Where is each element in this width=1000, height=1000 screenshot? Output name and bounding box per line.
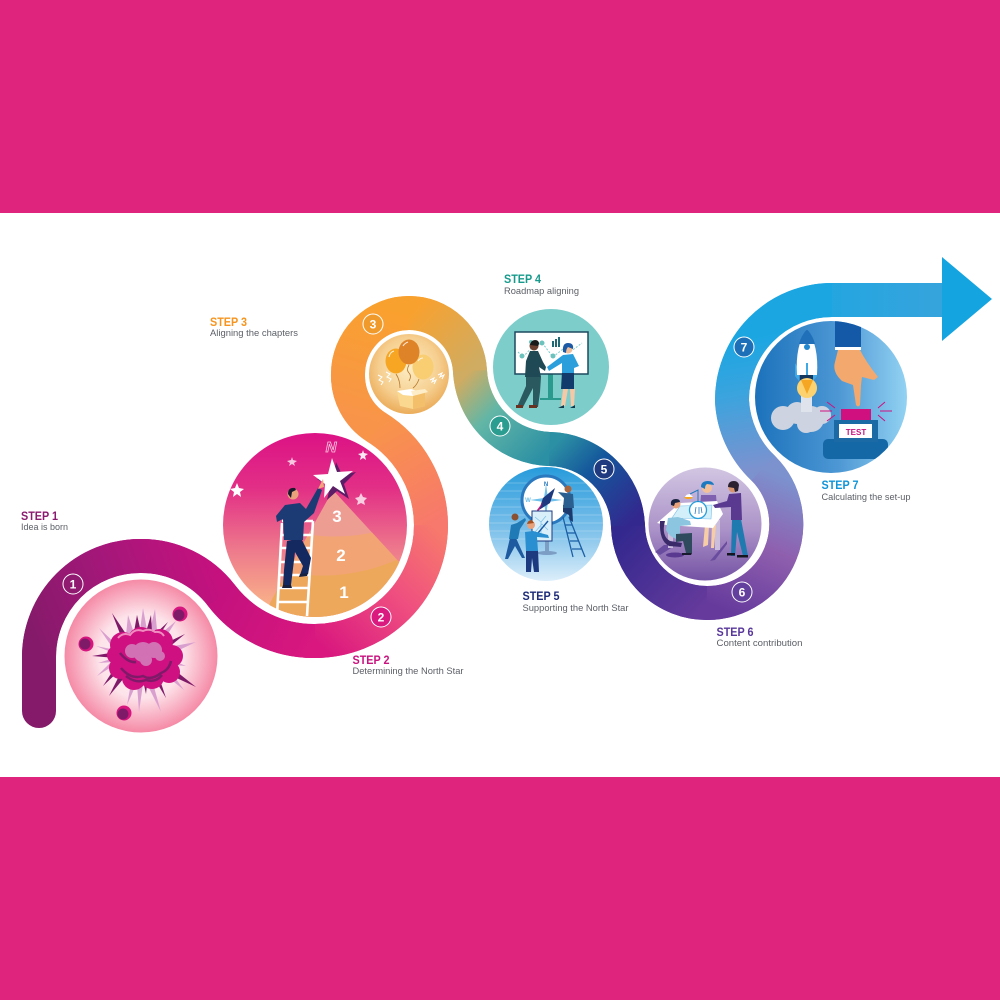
level numbers — [332, 507, 349, 602]
badge 1 — [63, 574, 83, 594]
step 5 label: Supporting the North Star — [522, 603, 628, 614]
ladder — [563, 517, 585, 557]
illustration: roadmap aligning — [493, 309, 609, 425]
badge 7 — [734, 337, 754, 357]
map display — [532, 511, 557, 555]
step 3 label: Aligning the chapters — [210, 328, 298, 339]
compass: W — [525, 498, 531, 504]
star — [313, 458, 356, 500]
pointing hand — [834, 350, 878, 406]
illustration: explosion idea — [64, 580, 218, 732]
top pink band — [0, 0, 1000, 213]
test machine base — [823, 439, 888, 459]
step 6 label: Content contribution — [716, 638, 802, 649]
small stars — [230, 450, 368, 505]
step 4 label — [504, 272, 579, 297]
badge 6 — [732, 582, 752, 602]
badge 5: 5 — [601, 462, 608, 476]
cloud — [107, 627, 183, 690]
cloud highlight — [125, 642, 165, 666]
badge 2: 2 — [378, 610, 385, 624]
step 4 label: STEP 4 — [504, 272, 541, 286]
level numbers: 2 — [336, 546, 346, 565]
step 5 label: STEP 5 — [522, 589, 560, 603]
button housing — [834, 420, 878, 442]
step 7 label: STEP 7 — [822, 478, 859, 492]
step 5 label — [522, 589, 628, 614]
badge 6: 6 — [739, 586, 746, 600]
man — [516, 340, 546, 408]
whiteboard — [515, 332, 588, 400]
step 4 label: Roadmap aligning — [504, 286, 579, 297]
step 1 label — [21, 509, 68, 533]
particles — [78, 606, 188, 720]
step 3 label: STEP 3 — [210, 315, 247, 329]
balloons — [386, 340, 434, 388]
person left — [505, 514, 526, 559]
standing man — [713, 481, 748, 558]
badge 7: 7 — [741, 340, 748, 354]
winding road arrow — [39, 257, 992, 711]
ladder — [277, 521, 313, 616]
step 7 label: Calculating the set-up — [822, 492, 910, 503]
step 6 label: STEP 6 — [716, 625, 754, 639]
test label — [839, 424, 872, 438]
step 2 label — [352, 653, 464, 677]
N letter: N — [326, 439, 338, 456]
step 1 label: Idea is born — [21, 522, 68, 533]
badge 2 — [371, 607, 391, 627]
illustration: supporting the north star — [489, 467, 603, 581]
woman — [547, 343, 579, 408]
step 2 label: STEP 2 — [352, 653, 390, 667]
smoke cloud — [771, 392, 831, 433]
level numbers: 1 — [339, 583, 349, 602]
table legs — [655, 520, 727, 561]
step 1 label: STEP 1 — [21, 509, 58, 523]
woman behind table — [700, 481, 717, 548]
person middle — [525, 520, 549, 572]
badge 3: 3 — [370, 318, 377, 332]
illustration: rocket launch and test button — [755, 318, 907, 473]
table top — [657, 490, 723, 528]
level numbers: 3 — [332, 507, 342, 526]
climbing man — [276, 479, 324, 588]
sleeve — [835, 321, 861, 347]
light cone — [270, 492, 400, 617]
dark spikes — [92, 613, 196, 698]
person on ladder — [558, 486, 574, 522]
button — [841, 409, 871, 421]
bottom pink band — [0, 777, 1000, 1000]
compass — [522, 476, 570, 524]
light spikes — [96, 608, 196, 712]
illustration: balloons and box — [369, 334, 449, 414]
badge 5 — [594, 459, 614, 479]
illustration: content contribution — [648, 468, 762, 580]
step 6 label — [716, 625, 802, 649]
gift box — [397, 389, 428, 409]
signal ticks — [820, 402, 892, 421]
compass: N — [544, 482, 548, 488]
cuff — [835, 347, 861, 350]
step 2 label: Determining the North Star — [352, 666, 464, 677]
ribbons — [378, 372, 444, 385]
badge 4 — [490, 416, 510, 436]
illustration: north star ladder — [223, 433, 407, 635]
badge 1: 1 — [70, 578, 77, 592]
step 3 label — [210, 315, 298, 339]
step 7 label — [822, 478, 910, 503]
seated man — [660, 499, 692, 558]
badge 3 — [363, 314, 383, 334]
rocket — [795, 329, 817, 398]
badge 4: 4 — [497, 420, 504, 434]
test text: TEST — [846, 428, 866, 437]
